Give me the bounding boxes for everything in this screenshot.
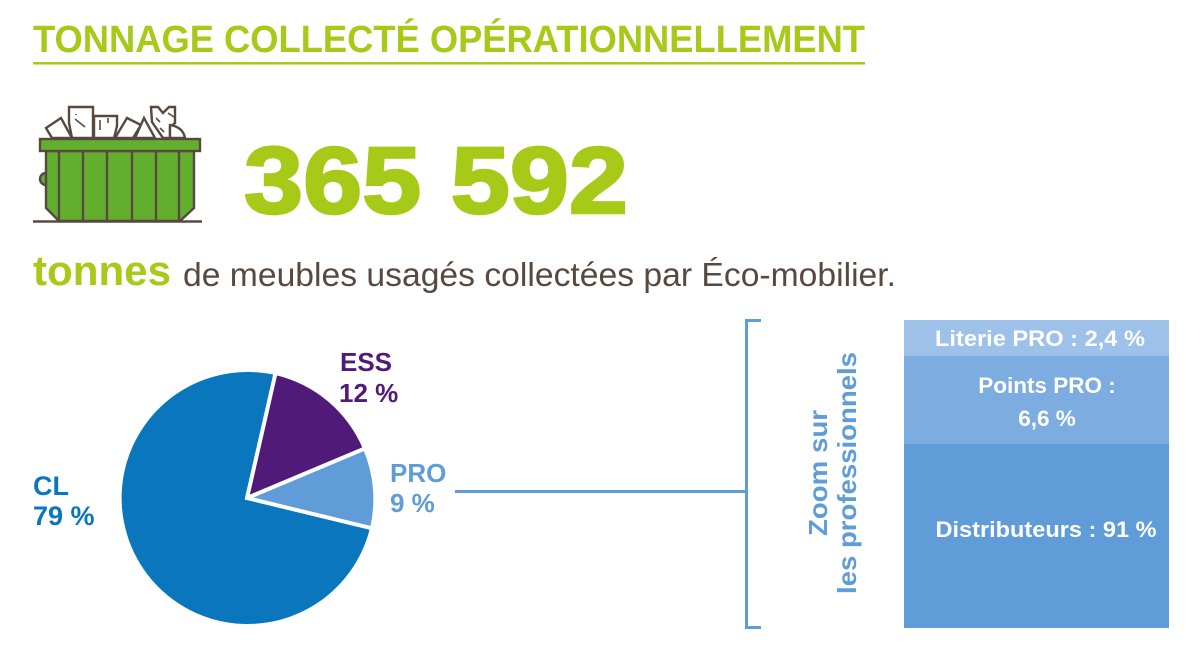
label: ESS: ESS (340, 347, 392, 377)
segment: Literie PRO (904, 320, 1169, 356)
segment: Distributeurs: Distributeurs : 91 % (936, 517, 1156, 542)
rotated label: zoom sur les professionnels (803, 352, 862, 594)
rotated label: zoom sur les professionnels: les professionnels (832, 352, 862, 594)
connector bracket (455, 320, 761, 628)
subtitle: tonnes (33, 247, 171, 294)
pie slice: CL (122, 372, 370, 624)
segment: Points PRO (904, 356, 1169, 444)
label: ESS: 12 % (339, 378, 398, 408)
icon: dumpster full of furniture waste (33, 107, 202, 222)
pie slice: ESS (247, 375, 363, 498)
subtitle (33, 247, 896, 294)
segment: Points PRO: Points PRO : (978, 373, 1116, 398)
pie slice: PRO (247, 449, 373, 528)
label: CL: CL (33, 471, 69, 501)
title: TONNAGE COLLECTÉ OPÉRATIONNELLEMENT (33, 17, 865, 61)
big number: 365 592 (244, 128, 628, 234)
segment: Literie PRO: Literie PRO : 2,4 % (935, 326, 1145, 351)
segment: Points PRO: 6,6 % (1018, 406, 1076, 431)
label: PRO: 9 % (390, 488, 435, 518)
stacked bar: professionals (904, 320, 1169, 628)
pie chart (122, 371, 373, 624)
label: CL: 79 % (33, 501, 95, 531)
rotated label: zoom sur les professionnels: Zoom sur (803, 410, 833, 536)
subtitle: de meubles usagés collectées par Éco-mobilier. (183, 256, 896, 293)
label: PRO: PRO (390, 458, 446, 488)
segment: Distributeurs (904, 444, 1169, 628)
